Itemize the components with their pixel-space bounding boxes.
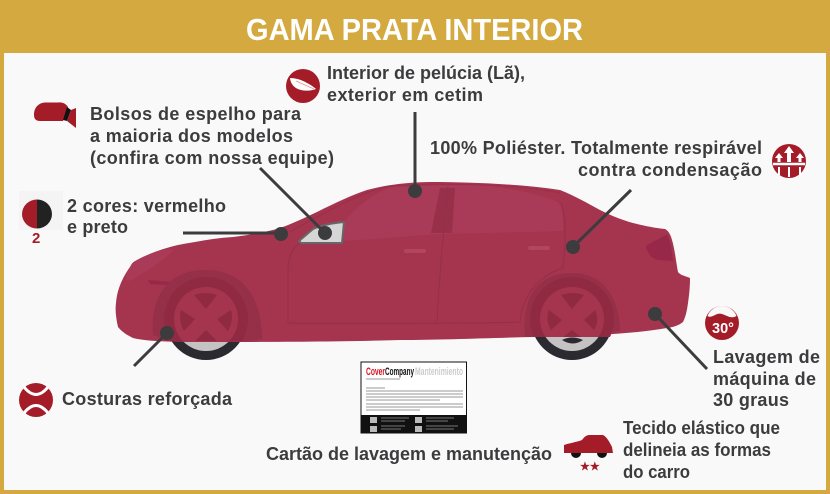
text: plush interior: [327, 63, 525, 105]
text: mirror pockets: a maioria dos modelos: [90, 126, 293, 146]
windows: [344, 185, 563, 241]
text: mirror pockets: Bolsos de espelho para: [90, 104, 302, 124]
rear wheel arch: [524, 273, 620, 337]
car illustration: [116, 182, 690, 361]
mirror on car: [299, 222, 344, 243]
icon: 30 degrees wash: 30°: [712, 320, 734, 337]
leader lines: [134, 112, 707, 369]
icon: feather: [286, 69, 320, 103]
text: elastic fabric: do carro: [623, 462, 690, 482]
text: care card caption: Cartão de lavagem e manutenção: [266, 444, 552, 464]
car body: [116, 182, 690, 342]
icon: car: ★★: [580, 461, 600, 473]
text: elastic fabric: Tecido elástico que: [623, 418, 780, 438]
care card: Mantenimiento: [415, 366, 463, 378]
indicator: [148, 280, 172, 285]
icon: breathable: [772, 144, 806, 178]
icon: two colours: [19, 191, 63, 247]
text: polyester: 100% Poliéster. Totalmente respirável: [430, 138, 762, 158]
icon: two colours: 2: [32, 230, 40, 247]
text: plush interior: exterior em cetim: [327, 85, 483, 105]
text: two colours: e preto: [67, 217, 128, 237]
roof rail: [290, 184, 560, 232]
text: polyester: contra condensação: [578, 160, 762, 180]
text: mirror pockets: [90, 104, 334, 168]
icon: seams: [19, 383, 53, 417]
pillar: [431, 188, 455, 233]
tail light: [646, 234, 673, 261]
front wheel arch: [152, 270, 262, 342]
title: GAMA PRATA INTERIOR: [246, 13, 583, 47]
text: elastic fabric: [623, 418, 780, 482]
icon: car: [564, 435, 613, 473]
text: mirror pockets: (confira com nossa equipe): [90, 148, 334, 168]
text: machine wash: 30 graus: [713, 390, 789, 410]
front wheel: [165, 278, 247, 360]
icon: mirror: [34, 102, 76, 128]
text: machine wash: Lavagem de: [713, 347, 820, 367]
icon: 30 degrees wash: [705, 306, 739, 340]
text: two colours: [67, 196, 226, 237]
door lines: [288, 186, 565, 323]
text: reinforced seams: Costuras reforçada: [62, 389, 233, 409]
care card: Cover: [366, 366, 385, 378]
headlight: [126, 250, 173, 281]
rear wheel: [531, 278, 613, 360]
text: polyester: [430, 138, 762, 180]
text: elastic fabric: delineia as formas: [623, 440, 771, 460]
door handles: [406, 248, 548, 251]
care card: [361, 362, 466, 433]
text: machine wash: máquina de: [713, 369, 816, 389]
text: machine wash: [713, 347, 820, 410]
text: two colours: 2 cores: vermelho: [67, 196, 226, 216]
rear hub: [540, 287, 604, 337]
text: plush interior: Interior de pelúcia (Lã),: [327, 63, 525, 83]
front hub: [174, 287, 238, 342]
care card: Company: [385, 366, 415, 378]
